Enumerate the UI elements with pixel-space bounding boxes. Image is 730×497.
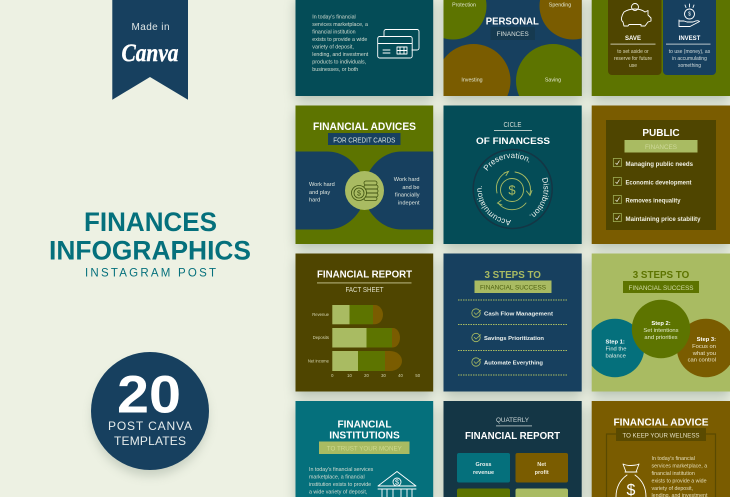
card: net profit: Net [537,462,546,468]
text block: advice: services marketplace, a [652,464,707,470]
heading: 3 steps green [623,269,699,293]
text: step 1: Find the [606,346,626,352]
card: save: to set aside or [617,49,649,55]
text block: institutions: marketplace, a financial [309,474,365,480]
bar chart: 40 [398,373,403,378]
text block: financial services: In today's financial [312,14,356,20]
text: step 2: Step 2: [651,321,671,327]
card: gross revenue: Gross [476,462,491,468]
checklist [613,158,701,223]
text block: advice: financial institution [652,471,695,477]
checklist: steps: Automate Everything [484,360,543,366]
card: invest: in accumulating [672,56,707,62]
text block: financial services: services marketplace, a [312,22,368,28]
heading: financial advice: TO KEEP YOUR WELNESS [622,432,700,440]
text: step 1: Step 1: [606,340,625,346]
shape: right navy panel [369,152,433,230]
text block: advice: variety of deposit, [652,486,693,492]
ribbon: Made in Canva: Canva [122,40,178,67]
heading: financial institutions: FINANCIAL [338,419,392,431]
icon: piggy bank [621,4,651,26]
text: step 2 [643,321,679,341]
text block: financial services [312,14,369,73]
card: light green metric [516,488,568,497]
curved labels: Distribution. [530,178,550,217]
heading: financial advice: FINANCIAL ADVICE [614,417,708,429]
text block: institutions: institution exists to provide [309,482,371,488]
heading: financial advices: FOR CREDIT CARDS [333,137,396,144]
curved labels: Preservation. [483,152,530,171]
text: work hard right: Work hard [394,177,420,183]
bar chart: 20 [364,373,369,378]
text: work hard left: hard [309,198,320,204]
labels: quadrants [452,2,571,84]
text: step 1: balance [606,354,626,360]
card: invest: to use (money), as [669,49,711,55]
panel: save and invest [592,0,730,96]
heading: circle of finances: CICLE [504,122,522,129]
bar chart: 30 [381,373,386,378]
diagram: finance cycle: $ [508,182,516,198]
title: Finances Infographics: INFOGRAPHICS [49,236,251,266]
text block: advice: In today's financial [652,456,695,462]
heading: circle of finances: OF FINANCESS [476,136,550,147]
checklist: Managing public needs [626,162,694,168]
heading: circle of finances [476,122,550,147]
text block: advice: exists to provide a wide [652,478,707,484]
bar chart: 10 [347,373,352,378]
panel: financial report fact sheet [296,254,433,392]
frame [606,434,716,497]
diagram: overlapping step circles [586,300,730,377]
text: step 3: Step 3: [697,337,716,343]
checklist: Maintaining price stability [626,217,701,223]
heading: 3 steps: FINANCIAL SUCCESS [480,284,547,292]
bar chart: Revenue [312,312,330,317]
bar chart: 50 [415,373,421,378]
bar chart [308,305,421,378]
panel: financial institutions: $ [395,480,399,486]
title: Finances Infographics: INSTAGRAM POST [85,268,216,280]
text: step 2: and priorities [644,335,678,341]
heading: personal finances [486,16,539,40]
card: net profit [516,453,568,482]
bar chart: Deposits [313,335,329,340]
text: work hard left: and play [309,190,330,196]
card: gross revenue: revenue [473,470,494,476]
panel: financial advices [296,106,433,244]
text block: financial services: variety of deposit, [312,44,354,50]
text block: institutions: a wide variety of deposit, [309,490,367,496]
icon: hand with coin [679,4,700,26]
curved labels [477,152,550,226]
text: step 2: Set intentions [643,328,679,334]
text block: advice [652,456,708,497]
checklist: Economic development [626,180,692,186]
heading: 3 steps green: 3 STEPS TO [633,269,689,281]
panel: personal finances [444,0,582,96]
panel: public finances [592,106,730,244]
card: net profit: profit [535,470,549,476]
panel: financial services text with credit cards [296,0,433,96]
text: step 3: can control [688,358,716,364]
text: work hard left: Work hard [309,182,335,188]
text block: financial services: businesses, or both [312,67,358,73]
text: step 3 [688,337,716,364]
card: gross revenue [457,453,510,482]
bar chart: Net income [308,358,330,364]
text block: financial services: lending, and investment [312,52,369,58]
heading: public finances: FINANCES [645,144,677,151]
title: Finances Infographics: FINANCES [84,207,217,237]
panel: 3 steps green [586,254,730,392]
bar chart: 0 [331,373,334,378]
badge: 20 post Canva templates: TEMPLATES [114,434,186,448]
icon: coins: $ [357,190,361,198]
heading: financial institutions [319,419,410,454]
heading: financial institutions: TO TRUST YOUR MONEY [327,446,402,452]
badge: 20 post Canva templates: 20 [117,366,181,425]
labels: quadrants: Protection [452,2,476,8]
dividers [458,300,568,375]
heading: personal finances: PERSONAL [486,16,539,28]
text: step 3: what you [692,351,716,357]
heading: 3 steps [474,269,552,293]
icon: circular arrows with dollar [496,172,532,210]
panel: circle of finances [444,106,582,244]
diagram: finance cycle [472,148,553,230]
title: Finances Infographics [49,207,251,280]
heading: financial report: FINANCIAL REPORT [317,269,413,281]
text block: financial services: products to individuals, [312,60,366,66]
text block: institutions [309,467,374,496]
panel: quarterly financial report [444,401,582,497]
text: work hard left [309,182,335,204]
panel: financial advice [592,401,730,497]
text: work hard right: financially [395,192,420,198]
heading: quarterly financial report: FINANCIAL REPORT [465,431,560,442]
heading: public finances: PUBLIC [642,128,680,139]
badge: 20 post Canva templates [91,352,209,476]
checklist: Removes inequality [626,198,681,204]
heading: personal finances: FINANCES [497,31,529,38]
heading: financial institutions: INSTITUTIONS [329,429,400,441]
heading: financial advice [614,417,708,441]
panel: 3 steps navy [444,254,582,392]
card: olive metric [457,488,510,497]
checklist: steps: Cash Flow Management [484,312,553,318]
heading: financial advices: FINANCIAL ADVICES [313,121,416,133]
ribbon: Made in Canva [112,0,188,100]
labels: quadrants: Investing [461,78,483,84]
badge: 20 post Canva templates: POST CANVA [108,419,192,433]
heading: financial advices [313,121,416,145]
panel: financial institutions [296,401,433,497]
heading: financial report: FACT SHEET [346,287,384,294]
card: save [608,0,662,75]
heading: quarterly financial report: QUATERLY [496,417,530,424]
heading: quarterly financial report [465,417,560,442]
shape: left navy panel [296,152,360,230]
heading: 3 steps green: FINANCIAL SUCCESS [628,285,694,292]
ribbon: Made in Canva: Made in [132,22,170,33]
checklist: steps: Savings Prioritization [484,336,544,342]
card: invest: $ [688,12,691,18]
heading: public finances [624,128,698,152]
text block: institutions: In today's financial services [309,467,374,473]
heading: financial report [317,269,413,294]
curved labels: Accumulation. [477,186,512,226]
card: save: use [629,63,637,69]
heading: 3 steps: 3 STEPS TO [484,269,541,281]
card: invest: INVEST [679,36,701,42]
icon: bank [378,472,416,497]
icon: money bag [616,464,646,497]
card: invest [663,0,716,75]
text block: financial services: exists to provide a wide [312,37,367,43]
icon: credit cards [378,30,419,58]
text: step 1 [606,340,626,360]
text: work hard right: and be [402,185,420,191]
text: work hard right: indepent [398,200,420,206]
labels: quadrants: Spending [549,2,571,8]
text block: financial services: financial institution [312,30,356,36]
chart: four quadrant circles [444,0,582,96]
card: save: SAVE [625,36,641,42]
labels: quadrants: Saving [545,78,561,84]
checklist: steps [472,309,553,366]
text: step 3: Focus on [692,344,716,350]
card: save: reserve for future [614,56,652,62]
text: work hard right [394,177,420,206]
card: invest: something [678,63,701,69]
